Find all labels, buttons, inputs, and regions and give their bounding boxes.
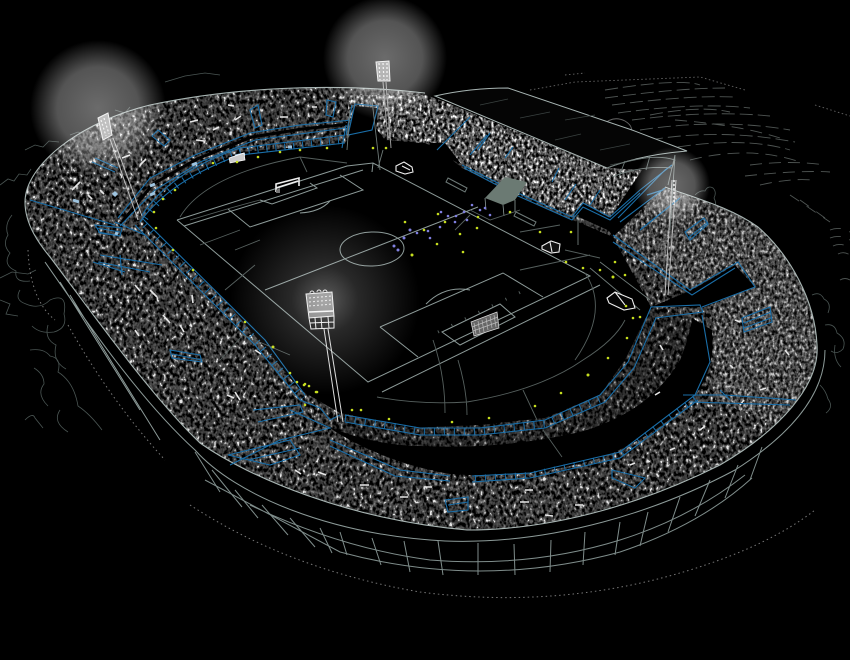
- roof: [435, 88, 687, 168]
- floodlight: northwest: [98, 113, 142, 220]
- pitch markings: [177, 163, 600, 392]
- parking rows top right: [530, 73, 850, 280]
- goal: south: [471, 312, 499, 336]
- blue rails: [30, 100, 796, 512]
- band between stand and east section: [606, 162, 684, 237]
- lower tier shade: [325, 307, 692, 447]
- light glow: foreground: [230, 205, 420, 395]
- roof shading lines: [480, 99, 650, 165]
- player benches: [446, 178, 536, 226]
- rail: main stand: [462, 165, 672, 220]
- rail: south upper: [330, 315, 710, 482]
- rail: north upper: [118, 104, 378, 226]
- rail: north lower: [140, 125, 346, 222]
- main stand crowd: [345, 95, 642, 218]
- dotted perimeter: [28, 250, 815, 598]
- car: north: [396, 162, 413, 174]
- car: middle: [542, 241, 560, 253]
- roof end truss: [607, 155, 675, 230]
- rail: south lower: [345, 305, 703, 435]
- light glow: north: [323, 0, 447, 120]
- floodlight: foreground: [306, 290, 343, 422]
- field stewards yellow dots: [153, 147, 641, 423]
- north entry void: [348, 106, 378, 134]
- players blue and white: [392, 204, 491, 252]
- white specks in crowd: [72, 105, 789, 516]
- goal: north: [276, 178, 299, 193]
- pale crowd highlights on rails: [73, 147, 292, 234]
- trees left: [0, 73, 844, 432]
- second wall lines: [45, 262, 825, 541]
- field and inner bowl void: [143, 127, 755, 428]
- light glow: northwest: [30, 40, 166, 176]
- rail: west: [30, 200, 305, 400]
- light glow: east: [634, 147, 710, 223]
- track arcs: [180, 100, 650, 457]
- crowd ring: [25, 87, 817, 530]
- dark crescent between tiers: [325, 318, 713, 475]
- rail: east: [613, 165, 772, 332]
- crowd east section lit: [613, 188, 817, 425]
- floodlight: north: [376, 61, 391, 148]
- gap between north tiers: [122, 124, 350, 222]
- floodlight: east: [665, 180, 676, 295]
- outer rim line: [25, 87, 817, 530]
- canopy over tunnel: [485, 177, 527, 216]
- perimeter wall posts: [195, 447, 762, 575]
- car: south: [607, 292, 635, 310]
- goal in stands: [229, 153, 245, 163]
